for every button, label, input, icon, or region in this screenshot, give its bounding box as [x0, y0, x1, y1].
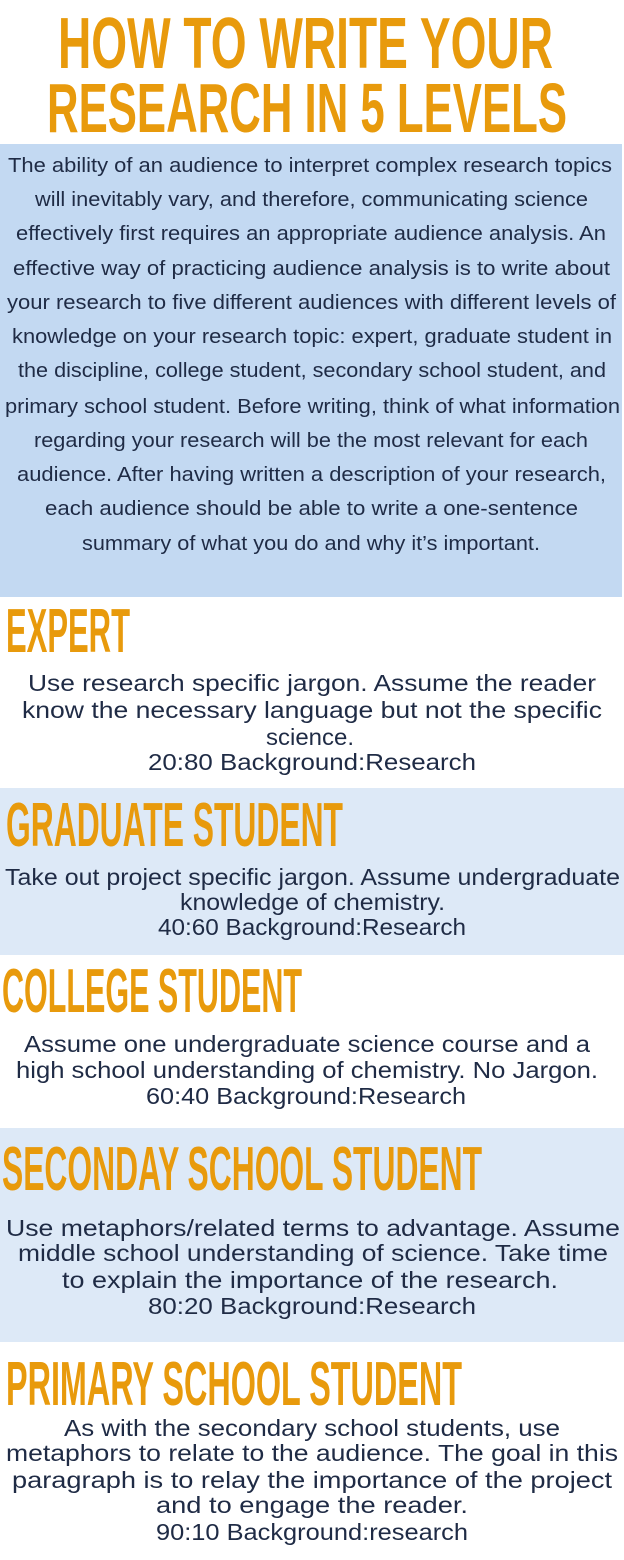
intro text: effective way of practicing audience analysis is to write about	[13, 258, 610, 280]
intro text: knowledge on your research topic: expert, graduate student in	[12, 326, 612, 348]
text: primary: metaphors to relate to the audience. The goal in this	[6, 1440, 618, 1466]
title	[47, 4, 567, 147]
text: expert: 20:80 Background:Research	[148, 749, 476, 775]
text: graduate: knowledge of chemistry.	[180, 889, 445, 915]
intro text: summary of what you do and why it’s important.	[82, 533, 540, 555]
text: secondary: middle school understanding of science. Take time	[18, 1240, 608, 1266]
text: primary: 90:10 Background:research	[156, 1519, 468, 1545]
panel: expert	[6, 597, 602, 775]
text: primary: and to engage the reader.	[156, 1492, 468, 1518]
intro text: your research to five different audiences with different levels of	[7, 292, 616, 314]
intro text: audience. After having written a description of your research,	[17, 464, 606, 486]
panel: graduate student	[0, 788, 624, 955]
text: graduate	[5, 864, 620, 940]
text: expert	[22, 670, 602, 775]
text: college: high school understanding of chemistry. No Jargon.	[16, 1057, 598, 1083]
panel: college student	[2, 957, 598, 1109]
text: graduate: Take out project specific jargon. Assume undergraduate	[5, 864, 620, 890]
intro text	[5, 155, 620, 555]
intro text: the discipline, college student, secondary school student, and	[18, 360, 606, 382]
text: secondary: to explain the importance of the research.	[62, 1267, 558, 1293]
panel: intro	[0, 144, 622, 597]
text: primary: paragraph is to relay the importance of the project	[12, 1467, 613, 1493]
intro text: each audience should be able to write a one-sentence	[45, 498, 578, 520]
text: college	[16, 1031, 598, 1109]
panel: primary school student	[6, 1350, 618, 1545]
text: secondary: Use metaphors/related terms to advantage. Assume	[6, 1215, 620, 1241]
text: primary	[6, 1415, 618, 1545]
intro text: The ability of an audience to interpret complex research topics	[8, 155, 612, 177]
text: college: 60:40 Background:Research	[146, 1083, 466, 1109]
text: graduate: 40:60 Background:Research	[158, 914, 466, 940]
heading: expert: EXPERT	[6, 597, 130, 666]
text: secondary: 80:20 Background:Research	[148, 1293, 476, 1319]
intro text: primary school student. Before writing, think of what information	[5, 396, 620, 418]
intro text: effectively first requires an appropriate audience analysis. An	[16, 223, 606, 245]
panel: college student: COLLEGE STUDENT	[2, 957, 302, 1026]
text: college: Assume one undergraduate science course and a	[24, 1031, 590, 1057]
intro text: will inevitably vary, and therefore, communicating science	[34, 189, 588, 211]
text: primary: As with the secondary school students, use	[64, 1415, 560, 1441]
text: secondary	[6, 1215, 620, 1319]
text: expert: science.	[266, 724, 354, 750]
intro text: regarding your research will be the most relevant for each	[34, 430, 588, 452]
panel: secondary school student	[0, 1128, 624, 1342]
text: expert: know the necessary language but not the specific	[22, 697, 602, 723]
text: expert: Use research specific jargon. Assume the reader	[28, 670, 596, 696]
